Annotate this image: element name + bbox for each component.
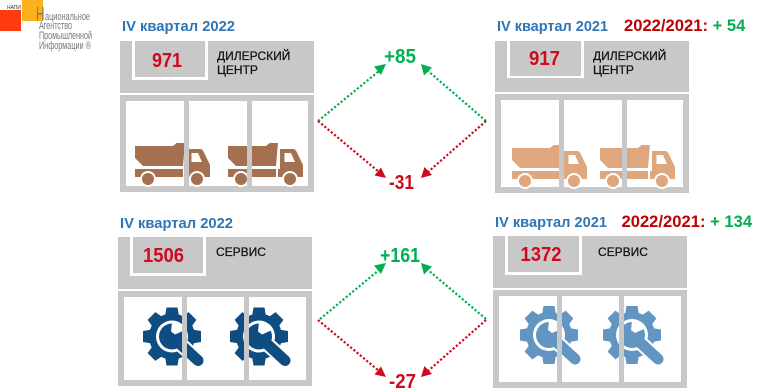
heading: quarter 2021 service: IV квартал 2021: [495, 214, 607, 231]
heading: quarter 2021 dealers: IV квартал 2021: [497, 18, 608, 35]
callout: service difference: 2022/2021: + 134: [622, 212, 753, 231]
value: 1506: 1506: [143, 245, 184, 267]
label: dealer center: ЦЕНТР: [217, 63, 258, 77]
panel: dealer centers Q4 2021: [495, 18, 689, 193]
value: +85: +85: [384, 46, 416, 68]
value: -31: -31: [389, 172, 414, 194]
logo: [0, 0, 92, 52]
logo: Информации ®: [39, 40, 91, 52]
callout: dealers difference: 2022/2021: + 54: [624, 16, 746, 35]
icons: dark gears: [143, 308, 289, 366]
value: 917: 917: [529, 48, 560, 70]
heading: quarter 2022 service: IV квартал 2022: [120, 215, 233, 232]
logo: Промышленной: [39, 30, 92, 42]
logo: Н: [36, 4, 44, 26]
label: service: СЕРВИС: [216, 245, 266, 259]
panel: dealer centers Q4 2022: [120, 18, 314, 192]
heading: quarter 2022 dealers: IV квартал 2022: [122, 18, 235, 35]
panel: service Q4 2021: [493, 214, 687, 388]
label: dealer center: ДИЛЕРСКИЙ: [217, 48, 290, 63]
value: +161: +161: [380, 245, 420, 267]
value: 971: 971: [152, 50, 182, 72]
label: dealer center: ЦЕНТР: [593, 63, 634, 77]
logo: НАПИ: [7, 5, 21, 11]
value: 1372: 1372: [520, 244, 562, 266]
icons: light gears: [520, 306, 662, 364]
label: dealer center: ДИЛЕРСКИЙ: [593, 48, 666, 63]
label: service: СЕРВИС: [598, 245, 648, 259]
icons: light trucks: [512, 145, 675, 189]
icons: dark trucks: [135, 143, 303, 187]
arrows: dealers comparison: [318, 64, 486, 178]
arrows: service comparison: [318, 263, 486, 377]
logo: Агентство: [39, 20, 72, 32]
logo: ациональное: [45, 11, 90, 23]
panel: service Q4 2022: [118, 215, 312, 386]
